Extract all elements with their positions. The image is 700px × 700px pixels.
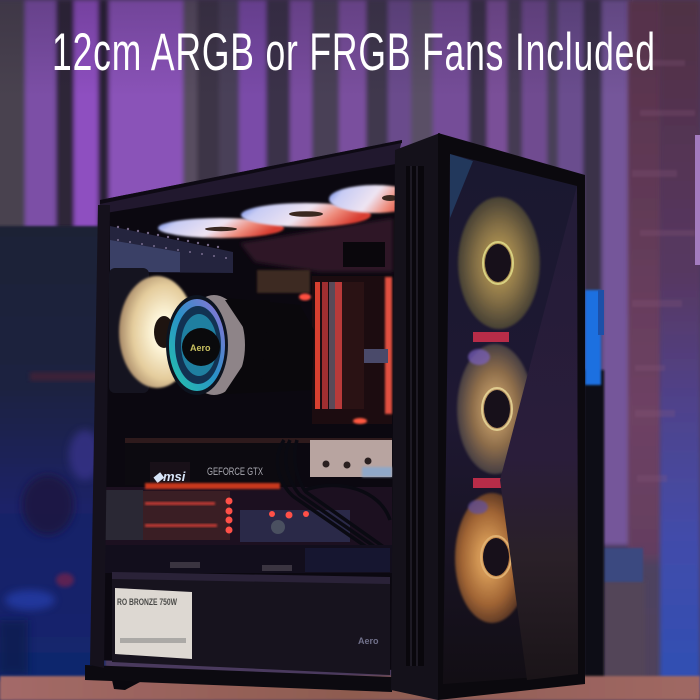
side radiator fan (109, 268, 195, 393)
graphics card (125, 438, 392, 485)
base rail (85, 665, 392, 692)
red strip upper (473, 332, 509, 342)
front fan 2 (457, 344, 533, 474)
front vented pillar (391, 133, 440, 700)
top fan 3 (329, 185, 421, 213)
red strip lower (473, 478, 508, 488)
GeForce label: GEFORCE GTX (207, 466, 263, 478)
top fan 1 (158, 218, 284, 238)
PSU label (115, 588, 192, 659)
PSU shroud (112, 573, 390, 675)
front diagonal reflection (500, 186, 578, 680)
cables (277, 440, 390, 562)
pump logo: Aero (190, 343, 211, 353)
beige cables (257, 270, 310, 293)
front panel frame (438, 133, 585, 700)
table top (0, 676, 700, 700)
Aerocool logo on PSU: Aero (358, 636, 379, 646)
top fan 2 (241, 203, 371, 227)
top panel of case (100, 140, 402, 214)
PSU label: RO BRONZE 750W (117, 597, 177, 607)
graphics card: ◆msi (153, 469, 186, 484)
front mesh panel (443, 154, 578, 684)
red lit PCI area (102, 483, 392, 545)
upper interior tray glow (240, 218, 393, 272)
case interior (92, 150, 395, 670)
perforated plate (110, 226, 233, 273)
title: 12cm ARGB or FRGB Fans Included (52, 22, 655, 82)
left pillar (90, 205, 110, 668)
black rectangle in tray (343, 242, 385, 267)
PC case (85, 133, 585, 700)
AIO pump (166, 295, 314, 395)
front fan 1 (458, 197, 540, 329)
bottom vent fans (102, 545, 392, 573)
front fan 3 (455, 493, 529, 623)
motherboard and RAM (299, 276, 392, 424)
